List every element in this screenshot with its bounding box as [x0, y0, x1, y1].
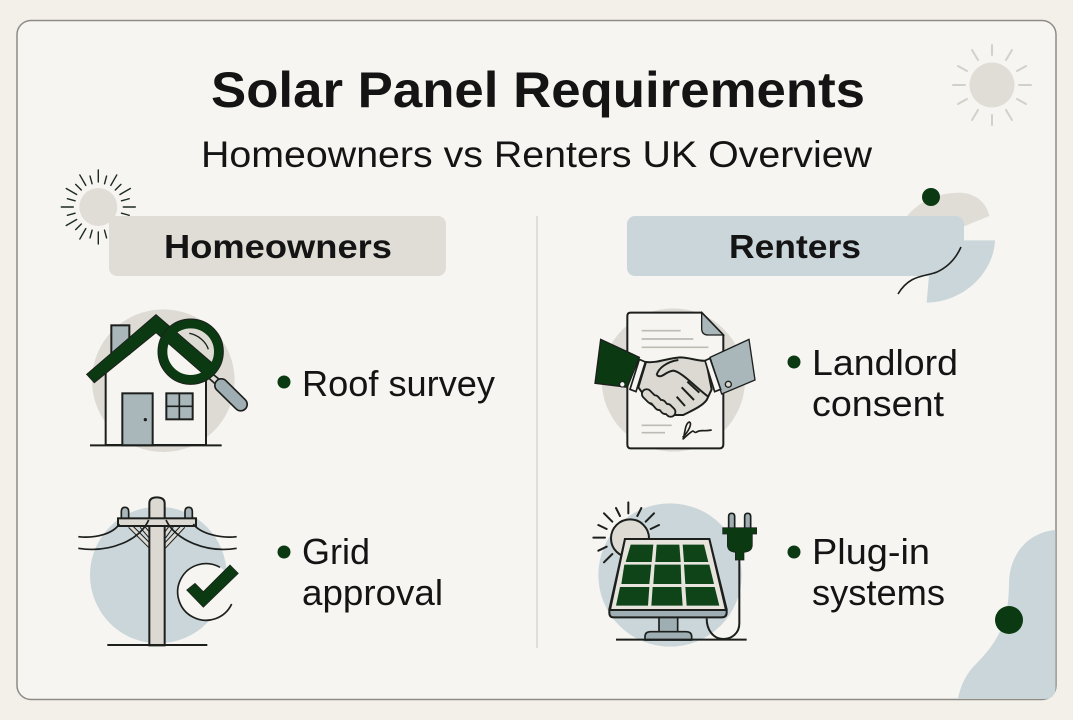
column divider — [536, 216, 538, 648]
title: Solar Panel Requirements — [211, 62, 865, 118]
icon: house with magnifier — [87, 309, 241, 452]
bullet: roof survey: Roof survey — [302, 363, 495, 404]
subtitle: Homeowners vs Renters UK Overview — [201, 134, 872, 175]
bullet: landlord consent: consent — [812, 383, 944, 424]
decoration: left sun — [61, 170, 135, 244]
heading: homeowners pill — [109, 216, 446, 276]
bullet: grid approval — [278, 531, 443, 613]
decoration: top right sun — [953, 45, 1031, 125]
decoration: renters corner shapes — [907, 193, 995, 303]
decoration: dot and curved line — [898, 188, 961, 294]
heading: renters pill: Renters — [729, 228, 861, 265]
decoration: bottom right blob — [958, 530, 1056, 699]
bullet: grid approval: Grid — [302, 531, 370, 572]
heading: renters pill — [627, 216, 964, 276]
icon: handshake over signed document — [595, 308, 755, 452]
panel: homeowners column — [61, 170, 495, 645]
bullet: plug-in systems: systems — [812, 572, 945, 613]
bullet: landlord consent — [788, 342, 958, 424]
icon: utility pole with check — [78, 497, 238, 645]
heading: homeowners pill: Homeowners — [164, 228, 392, 265]
bullet: plug-in systems — [788, 531, 945, 613]
decoration: bottom right dot — [995, 606, 1023, 634]
icon: solar panel with plug — [593, 502, 757, 647]
bullet: plug-in systems: Plug-in — [812, 531, 930, 572]
panel: renters column — [593, 188, 964, 647]
bullet: landlord consent: Landlord — [812, 342, 958, 383]
bullet: grid approval: approval — [302, 572, 443, 613]
